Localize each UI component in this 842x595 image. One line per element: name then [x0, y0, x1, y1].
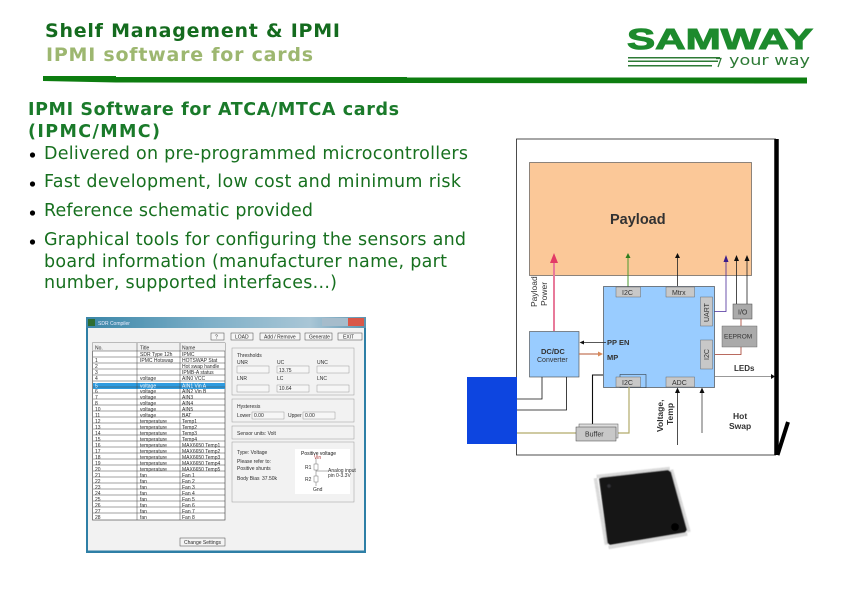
subtitle: IPMI software for cards: [46, 44, 313, 66]
sensor table: 2: [95, 364, 98, 370]
sensor table: temperature: [140, 431, 167, 437]
sensor table: fan: [140, 473, 147, 479]
MTCA port: Mtrx: [672, 290, 686, 297]
thresholds panel: Thresholds: [237, 353, 262, 359]
ADC port: [666, 377, 694, 387]
sensor table: AIN4: [182, 401, 193, 407]
sensor table: temperature: [140, 455, 167, 461]
purple arrow from UART: [712, 255, 728, 312]
bullet 3: Reference schematic provided: [44, 201, 313, 221]
thresholds panel: [232, 348, 354, 395]
sensor table: 24: [95, 491, 101, 497]
board outline: [516, 139, 776, 455]
change settings button: Change Settings: [184, 540, 221, 546]
sensor table: Fan 1: [182, 473, 195, 479]
logo: SAMWAY: SAMWAY: [627, 24, 813, 56]
sensor table: Temp4: [182, 437, 197, 443]
bullet 1: Delivered on pre-programmed microcontrollers: [44, 144, 468, 164]
sensor table: 25: [95, 497, 101, 503]
sensor table: temperature: [140, 419, 167, 425]
sensor table: BAT: [182, 413, 191, 419]
sensor table: MAX6650 Temp3: [182, 455, 220, 461]
latch: [778, 422, 788, 455]
software screenshot: SDR Compiler window: SDR Compiler: [98, 321, 130, 327]
software screenshot: SDR Compiler window: Add / Remove: [264, 334, 296, 340]
sensor table: Fan 8: [182, 515, 195, 521]
sensor table: MAX6650 Temp1: [182, 443, 220, 449]
sensor table: voltage: [140, 395, 156, 401]
heading: IPMI Software for ATCA/MTCA cards: [28, 100, 399, 120]
sensor table: [92, 343, 225, 521]
sensor table: 27: [95, 509, 101, 515]
microcontroller block: PP EN: [607, 338, 629, 347]
sensor table: 16: [95, 443, 101, 449]
sensor type panel with circuit: Analog input: [328, 468, 356, 474]
EEPROM block: EEPROM: [724, 334, 752, 340]
sensor table: Fan 6: [182, 503, 195, 509]
buffer block: [576, 424, 618, 441]
sensor table: AIN5: [182, 407, 193, 413]
sensor table: voltage: [140, 407, 156, 413]
sensor table: fan: [140, 503, 147, 509]
header rule: [43, 76, 807, 84]
DC/DC converter: DC/DC: [541, 347, 565, 356]
I2C bottom port: [616, 374, 646, 388]
sensor table: fan: [140, 497, 147, 503]
voltage and temp input: Voltage,: [655, 400, 665, 432]
sensor type panel with circuit: [232, 442, 356, 502]
sensor table: voltage: [140, 384, 156, 390]
sensor table: 23: [95, 485, 101, 491]
sensor table: IPMB-A status: [182, 370, 214, 376]
chip notch: [671, 523, 679, 531]
sensor table: 21: [95, 473, 101, 479]
sensor type panel with circuit: Please refer to:: [237, 459, 271, 465]
buffer wiring: [592, 375, 603, 427]
software screenshot: SDR Compiler window: ?: [215, 334, 218, 340]
buffer block: Buffer: [585, 432, 604, 438]
I2C side port: [700, 340, 712, 369]
thresholds panel: LNR: [237, 376, 247, 382]
hysteresis panel: [232, 399, 354, 422]
sensor table: temperature: [140, 449, 167, 455]
microcontroller block: [604, 286, 714, 388]
sensor table: temperature: [140, 467, 167, 473]
sensor table: Temp1: [182, 419, 197, 425]
sensor table: IPMC: [182, 352, 195, 358]
connector block: [467, 377, 517, 444]
hysteresis panel: Upper: [288, 413, 302, 419]
sensor table: Name: [182, 346, 196, 352]
sensor table: Temp3: [182, 431, 197, 437]
sensor table: 28: [95, 515, 101, 521]
heading: (IPMC/MMC): [28, 122, 160, 142]
voltage and temp input: Temp: [665, 403, 675, 425]
ADC port: ADC: [672, 380, 687, 387]
payload power arrow: Payload: [529, 276, 539, 307]
hysteresis panel: 0.00: [305, 413, 315, 419]
voltage and temp input: [655, 388, 680, 445]
bullet 2: Fast development, low cost and minimum risk: [44, 172, 462, 192]
payload power arrow: Power: [539, 282, 549, 306]
I/O arrows: [734, 255, 750, 304]
sensor table: 20: [95, 467, 101, 473]
sensor table: MAX6650 Temp2: [182, 449, 220, 455]
payload block: Payload: [610, 212, 666, 228]
sensor table: 18: [95, 455, 101, 461]
thresholds panel: UNC: [317, 360, 328, 366]
text block: IPMI software description: [28, 100, 468, 293]
sensor table: SDR Type 12h: [140, 352, 173, 358]
I2C bottom port: I2C: [622, 380, 633, 387]
UART port: [700, 297, 712, 326]
PP EN arrow: [580, 340, 606, 344]
payload power arrow: [529, 253, 558, 331]
bullet 4: [30, 230, 466, 293]
sensor table: fan: [140, 491, 147, 497]
sensor table: Fan 3: [182, 485, 195, 491]
sensor table: 11: [95, 413, 100, 419]
software screenshot: SDR Compiler window: Generate: [309, 334, 330, 340]
sensor table: Fan 2: [182, 479, 195, 485]
thresholds panel: UNR: [237, 360, 248, 366]
microcontroller block: MP: [607, 353, 618, 362]
sensor table: fan: [140, 515, 147, 521]
sensor table: 12: [95, 419, 101, 425]
software screenshot: SDR Compiler window: LOAD: [235, 334, 249, 340]
sensor table: 5: [95, 384, 98, 390]
sensor table: Temp2: [182, 425, 197, 431]
sensor table: 7: [95, 395, 98, 401]
sensor table: Fan 5: [182, 497, 195, 503]
sensor table: No.: [95, 346, 103, 352]
thresholds panel: UC: [277, 360, 285, 366]
hot swap input: [700, 388, 751, 433]
sensor type panel with circuit: pin 0-3.3V: [328, 473, 351, 479]
thresholds panel: LC: [277, 376, 284, 382]
chip body: [599, 470, 687, 545]
sensor type panel with circuit: 37.50k: [262, 476, 278, 482]
sensor table: fan: [140, 479, 147, 485]
sensor table: voltage: [140, 401, 156, 407]
sensor table: Hot swap handle: [182, 364, 219, 370]
UART port: UART: [704, 302, 711, 322]
chip pins: [596, 468, 689, 548]
sensor table: Title: [140, 346, 149, 352]
power wires to connector: [517, 377, 566, 410]
sensor type panel with circuit: Positive shunts: [237, 466, 271, 472]
I2C top port: [616, 287, 640, 297]
DC/DC converter: [530, 332, 579, 377]
sensor table: 6: [95, 389, 98, 395]
software screenshot: SDR Compiler window: EXIT: [343, 334, 354, 340]
green arrow: [626, 253, 630, 287]
sensor table: MAX6650 Temp5: [182, 467, 220, 473]
sensor table: fan: [140, 485, 147, 491]
sensor table: IPMC Hotswap: [140, 358, 174, 364]
sensor table: voltage: [140, 413, 156, 419]
EEPROM block: [722, 326, 757, 347]
change settings button: [180, 538, 225, 546]
sensor table: temperature: [140, 443, 167, 449]
sensor table: 4: [95, 376, 98, 382]
sensor type panel with circuit: Body Bias: [237, 476, 260, 482]
DC/DC converter: Converter: [537, 357, 568, 364]
sensor table: voltage: [140, 376, 156, 382]
block diagram: [467, 139, 788, 455]
sensor type panel with circuit: R1: [305, 465, 312, 471]
sensor table: MAX6650 Temp4: [182, 461, 220, 467]
sensor table: 13: [95, 425, 101, 431]
software screenshot: SDR Compiler window: [86, 317, 366, 553]
sensor table: AIN1 Vin A: [182, 384, 207, 390]
sensor type panel with circuit: Positive voltage: [301, 451, 336, 457]
sensor table: temperature: [140, 437, 167, 443]
hot swap input: Swap: [729, 421, 751, 431]
title: [45, 20, 340, 66]
sensor type panel with circuit: R2: [305, 477, 312, 483]
bullet 4: board information (manufacturer name, part: [44, 252, 447, 272]
black arrow from MTCA: [675, 253, 680, 286]
thresholds panel: LNC: [317, 376, 327, 382]
MP arrow: [579, 352, 603, 356]
board thick edge: [774, 139, 779, 455]
sensor table: HOTSWAP Stat: [182, 358, 218, 364]
sensor table: 1: [95, 358, 98, 364]
sensor table: 14: [95, 431, 101, 437]
logo: SAMWAY: [627, 24, 813, 69]
sensor table: 19: [95, 461, 101, 467]
I2C top port: I2C: [622, 290, 633, 297]
I2C side port: I2C: [704, 349, 711, 360]
heading: [28, 100, 399, 142]
bullet 4: Graphical tools for configuring the sensors and: [44, 230, 466, 250]
sensor table: fan: [140, 509, 147, 515]
I/O block: [733, 304, 752, 319]
thresholds panel: 10.64: [279, 386, 292, 392]
LEDs output: LEDs: [734, 364, 755, 373]
sensor table: temperature: [140, 461, 167, 467]
logo tagline: your way: [729, 53, 810, 69]
sensor table: 26: [95, 503, 101, 509]
bullet 4: number, supported interfaces...): [44, 273, 337, 293]
hysteresis panel: Lower: [237, 413, 251, 419]
sensor table: 22: [95, 479, 101, 485]
payload block: [530, 162, 752, 276]
microcontroller chip photo: [596, 468, 689, 548]
hysteresis panel: 0.00: [254, 413, 264, 419]
MTCA port: [666, 287, 694, 297]
title: Shelf Management & IPMI: [45, 20, 340, 42]
sensor unit panel: [232, 426, 354, 439]
pin 1 marker: [607, 484, 611, 488]
sensor type panel with circuit: Vin: [314, 455, 321, 461]
thresholds panel: 13.75: [279, 368, 292, 374]
sensor table: 8: [95, 401, 98, 407]
sensor type panel with circuit: Gnd: [313, 487, 323, 493]
sensor table: AIN3: [182, 395, 193, 401]
sensor table: temperature: [140, 425, 167, 431]
sensor table: 3: [95, 370, 98, 376]
I/O block: I/O: [738, 310, 748, 316]
sensor table: Fan 7: [182, 509, 195, 515]
EEPROM wiring: [715, 319, 741, 354]
toolbar buttons: [211, 333, 362, 340]
sensor table: 17: [95, 449, 101, 455]
sensor table: Fan 4: [182, 491, 195, 497]
sensor table: 10: [95, 407, 101, 413]
sensor table: AIN2 Vin B: [182, 389, 207, 395]
sensor table: 15: [95, 437, 101, 443]
hysteresis panel: Hysteresis: [237, 404, 261, 410]
sensor type panel with circuit: Type: Voltage: [237, 450, 268, 456]
hot swap input: Hot: [733, 411, 747, 421]
LEDs output: [715, 364, 775, 379]
sensor table: AIN0 VCC: [182, 376, 205, 382]
sensor table: voltage: [140, 389, 156, 395]
sensor unit panel: Sensor units: Volt: [237, 431, 277, 437]
